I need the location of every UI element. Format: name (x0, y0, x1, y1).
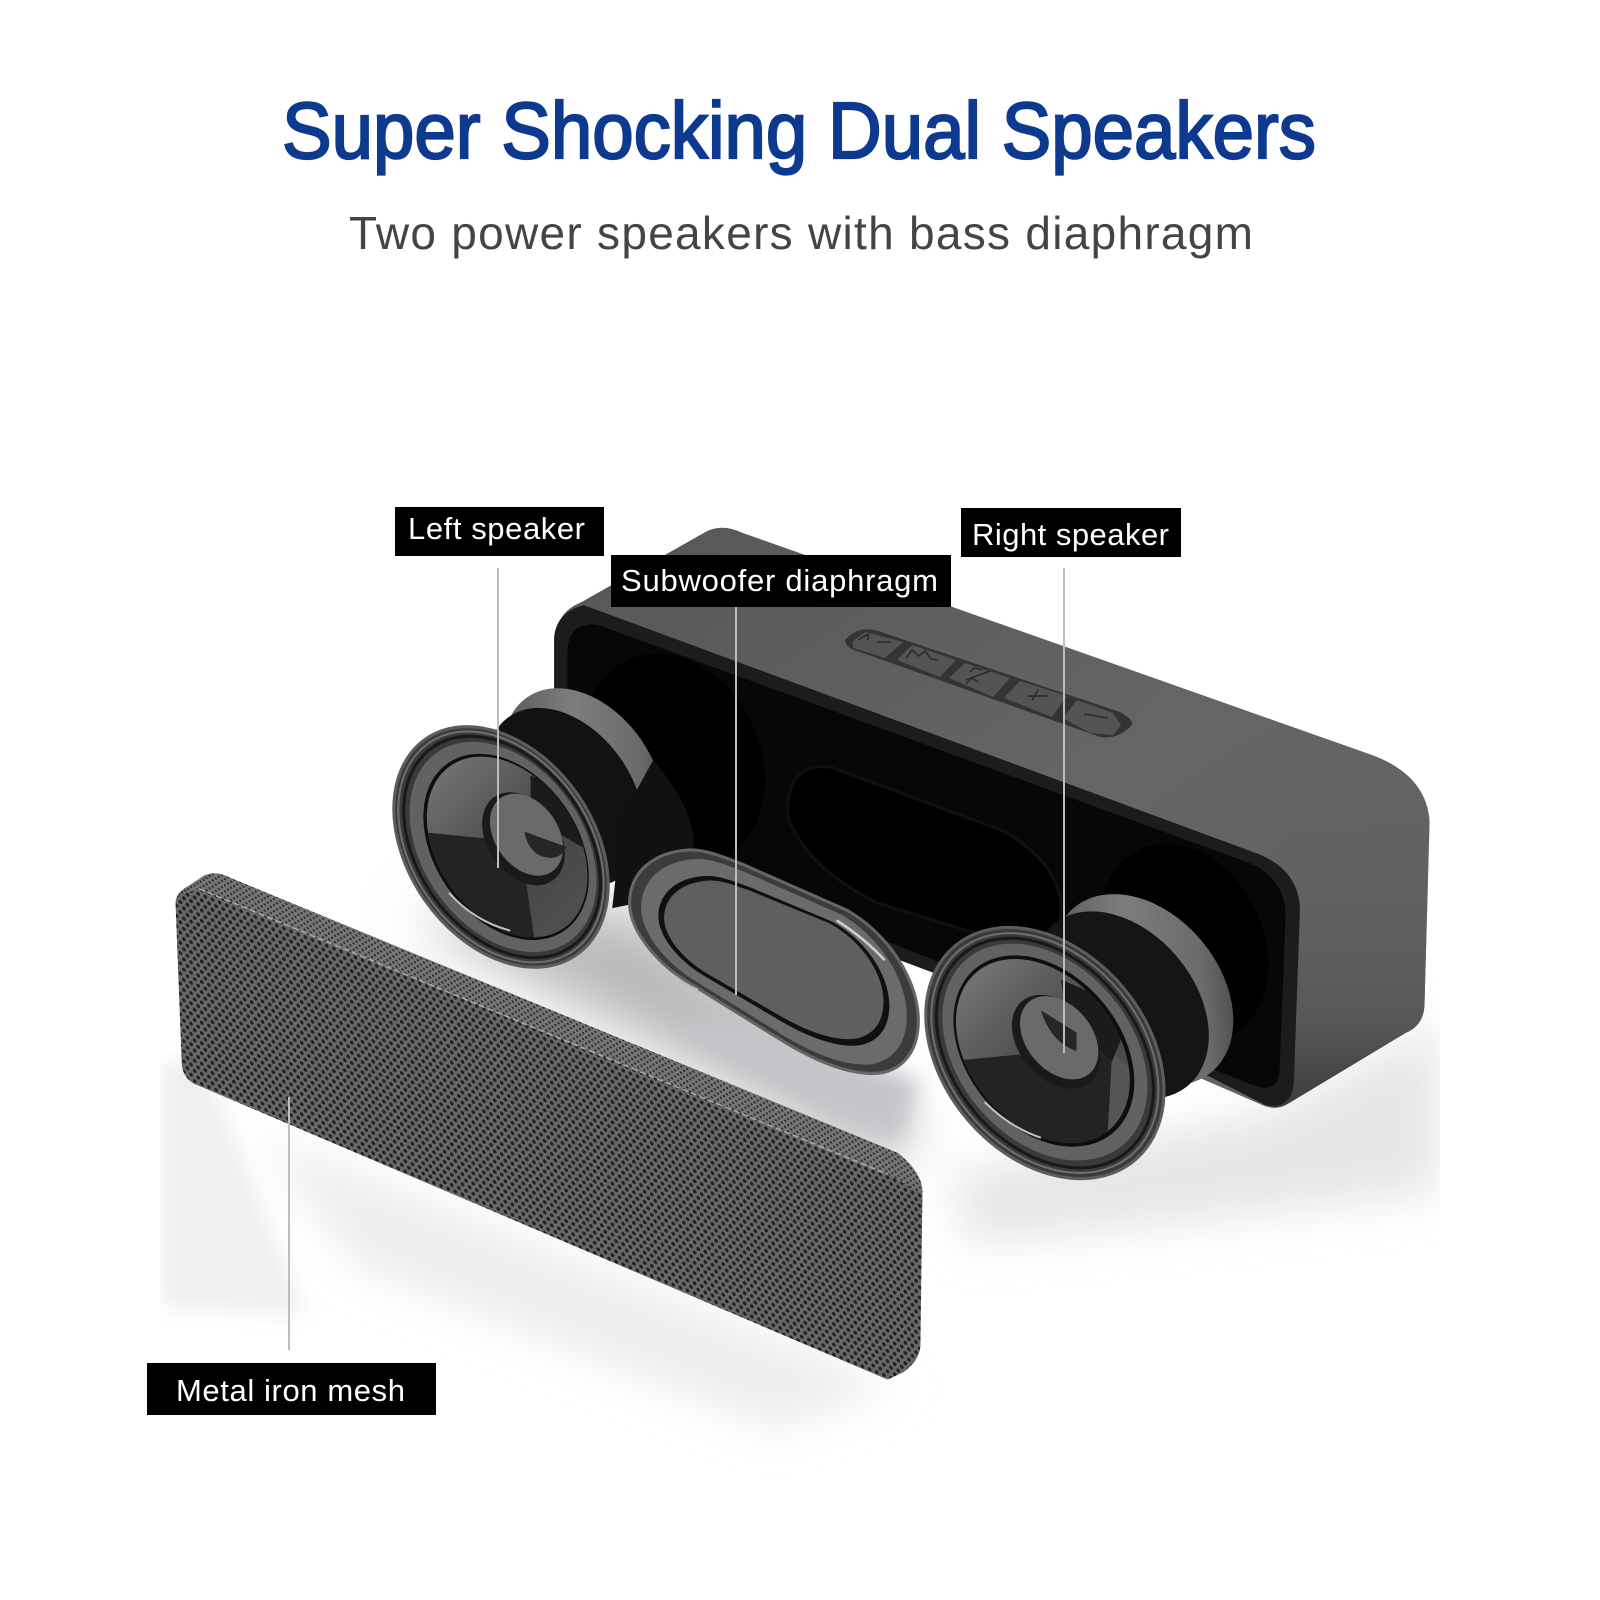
front panel (567, 624, 1286, 1088)
magnet barrel (1015, 859, 1270, 1121)
label: right speaker (961, 508, 1181, 557)
ring highlights (837, 920, 885, 960)
floor shadows (160, 908, 1440, 1429)
right driver cavity (1068, 816, 1300, 1072)
rim highlight (985, 1102, 1041, 1138)
leader line: metal iron mesh (288, 1097, 290, 1350)
left driver cavity (548, 624, 799, 897)
textured basket (612, 760, 694, 908)
label: metal iron mesh: Metal iron mesh (176, 1373, 405, 1408)
cone (956, 959, 1130, 1143)
leader line: subwoofer diaphragm (735, 607, 737, 995)
title: Super Shocking Dual Speakers (282, 86, 1316, 175)
rim highlight (449, 893, 510, 931)
mesh bevel edge (178, 873, 922, 1194)
dust cap (994, 978, 1118, 1106)
dust cap (465, 776, 582, 901)
label: subwoofer diaphragm: Subwoofer diaphragm (621, 563, 938, 598)
speaker body (548, 528, 1430, 1108)
subwoofer diaphragm (630, 850, 918, 1073)
dark coil hub (996, 877, 1245, 1133)
top and side shell (556, 528, 1430, 1108)
front frame (554, 605, 1300, 1106)
subwoofer cavity (788, 767, 1061, 947)
outer rim (349, 686, 653, 1008)
diaphragm plate (664, 880, 884, 1039)
exploded speaker illustration (160, 528, 1440, 1429)
right speaker driver (924, 894, 1234, 1180)
cone (426, 756, 588, 938)
label: metal iron mesh (147, 1363, 436, 1415)
label: left speaker: Left speaker (408, 511, 585, 546)
label: left speaker (395, 507, 604, 556)
dark coil hub (454, 678, 677, 916)
label: right speaker: Right speaker (972, 517, 1169, 552)
outer rim (877, 880, 1213, 1226)
side face (1265, 755, 1430, 1108)
magnet barrel (470, 658, 697, 899)
control buttons (845, 629, 1132, 737)
infographic canvas (147, 98, 1440, 1426)
subtitle: Two power speakers with bass diaphragm (349, 207, 1253, 259)
left speaker driver (392, 688, 694, 969)
label: subwoofer diaphragm (611, 555, 951, 607)
metal iron mesh (176, 873, 922, 1380)
leader line: right speaker (1063, 568, 1065, 1053)
leader line: left speaker (497, 568, 499, 868)
